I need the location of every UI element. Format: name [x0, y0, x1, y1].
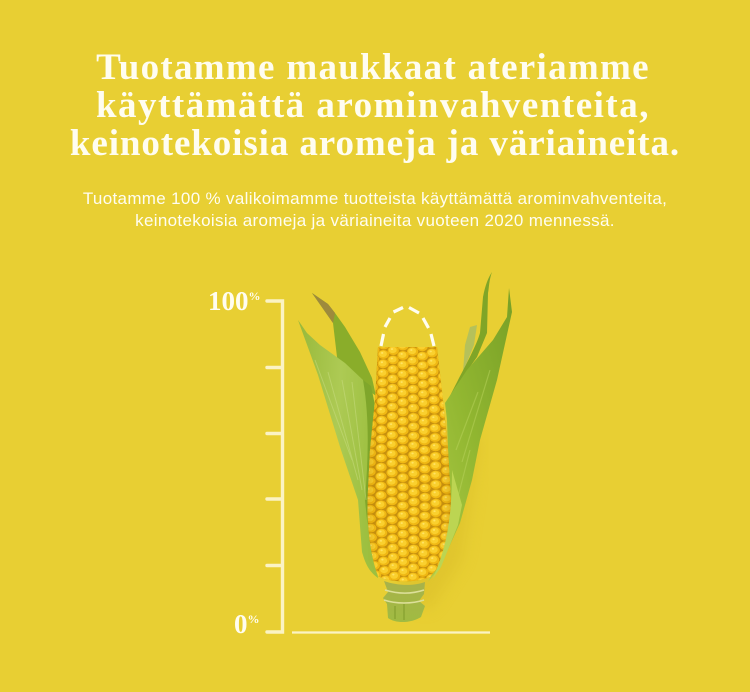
back right pale leaf	[463, 325, 477, 372]
label: 0%: %	[248, 612, 260, 626]
left leaf veins	[315, 360, 366, 500]
label: 100%: %	[248, 289, 260, 303]
narrow right leaf	[447, 272, 492, 402]
back left leaf	[312, 293, 376, 396]
baseline	[292, 631, 490, 634]
subtitle text block: keinotekoisia aromeja ja väriaineita vuoteen 2020 mennessä.	[135, 211, 615, 230]
outer right leaf	[428, 288, 512, 582]
title: käyttämättä arominvahventeita,	[96, 85, 650, 126]
title: Tuotamme maukkaat ateriamme	[96, 47, 650, 88]
corn stem	[383, 581, 425, 622]
corn cob	[298, 272, 512, 622]
label: 0%: 0	[234, 609, 248, 639]
subtitle text block: Tuotamme 100 % valikoimamme tuotteista käyttämättä arominvahventeita,	[83, 189, 667, 208]
title: keinotekoisia aromeja ja väriaineita.	[70, 123, 680, 164]
cob kernels	[368, 347, 451, 582]
left inner husk over cob	[367, 500, 378, 578]
right leaf highlights	[452, 370, 490, 520]
subtitle text block	[83, 189, 667, 230]
chart: corn progress scale	[210, 272, 512, 634]
outer left leaf	[298, 320, 378, 578]
right inner husk over cob	[432, 470, 462, 580]
title	[70, 47, 680, 164]
dashed target outline of the cob	[381, 308, 434, 346]
label: 100%: 100	[208, 286, 248, 316]
left leaf fold	[363, 380, 376, 530]
soft shadow	[395, 420, 480, 610]
leaf tip	[312, 293, 335, 323]
scale axis	[267, 301, 282, 632]
stem wrinkles	[384, 590, 424, 603]
